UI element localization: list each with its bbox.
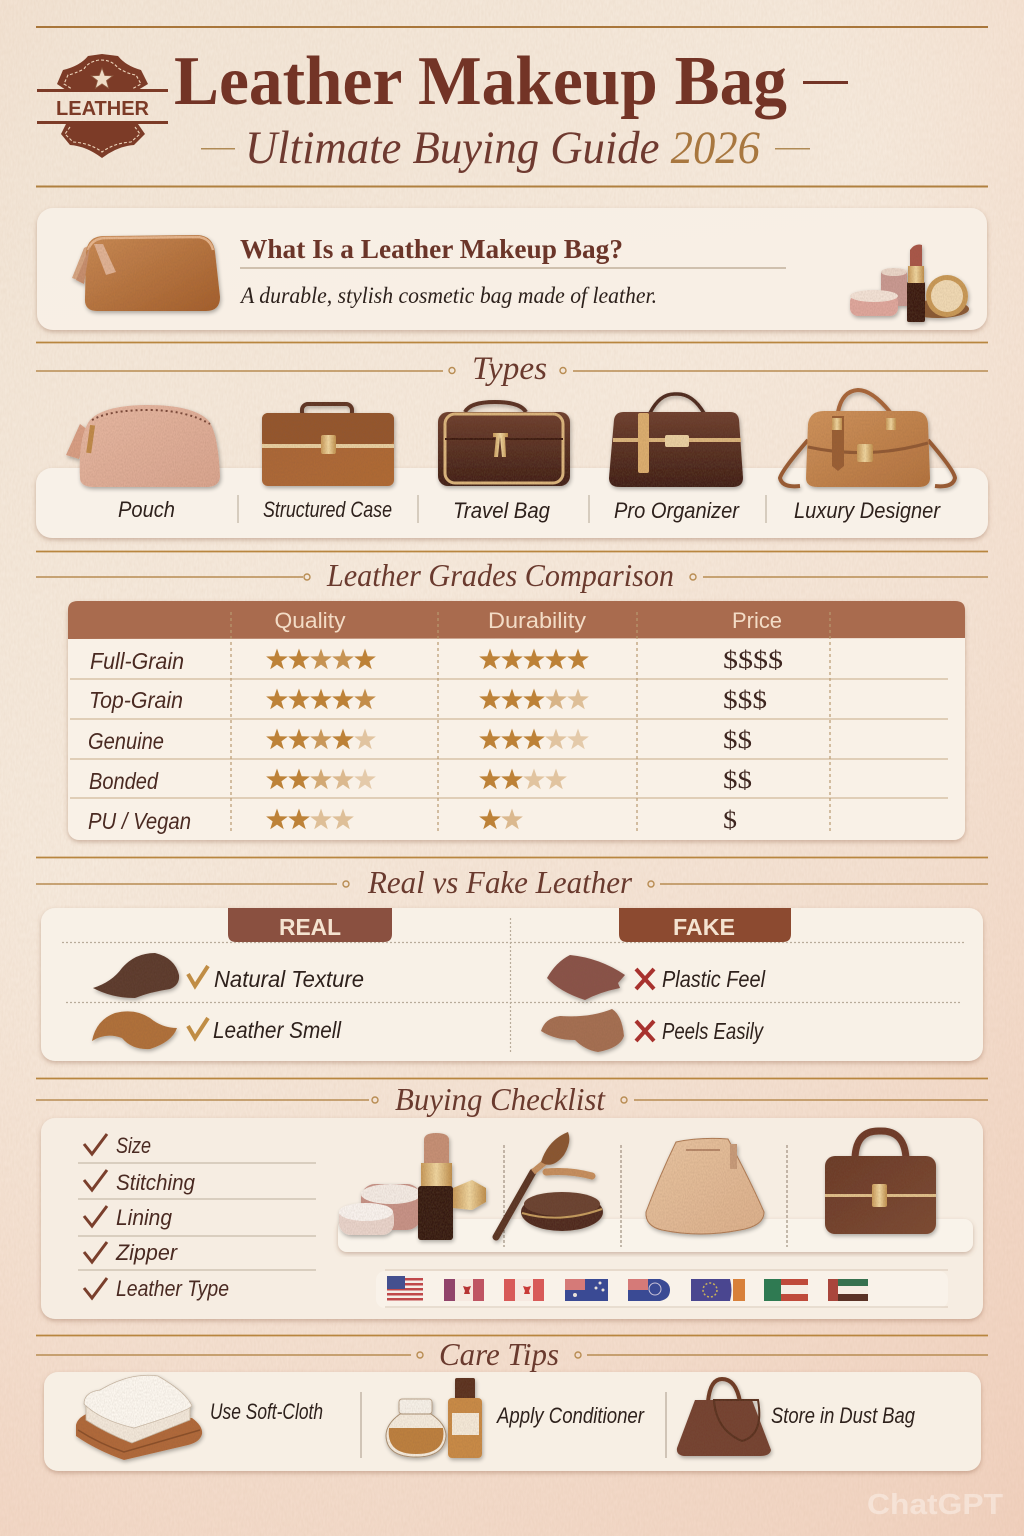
title: Leather Makeup Bag [174,43,787,120]
icon: folded cloth [76,1375,202,1460]
icon: travel bag [438,402,570,486]
type labels [118,497,942,523]
check: natural texture [188,966,208,986]
prices: $$ [723,727,752,754]
type labels: Structured Case [263,497,392,522]
subtitle flourishes [201,148,810,150]
label: natural texture: Natural Texture [214,966,364,992]
icon: brush and pot [496,1132,603,1237]
table header: Durability [488,608,586,633]
section heading: real vs fake leather: Real vs Fake Leather [367,864,633,900]
swatch: fake plastic [547,955,625,1000]
panel: types [36,390,988,538]
flag: uae style [828,1279,868,1301]
icon: pouch [66,405,220,487]
row names: Full-Grain [90,648,184,674]
icon: beige bag [646,1138,764,1234]
tab: real: REAL [279,914,341,940]
checklist: Lining [116,1205,173,1230]
flag: canada [504,1279,544,1301]
row names [88,648,191,834]
flag: usa [387,1276,423,1300]
icon: luxury designer bag [780,390,955,487]
checklist: Zipper [115,1240,179,1265]
row names: PU / Vegan [88,808,191,834]
checklist: Leather Type [116,1276,229,1301]
icon: lipstick and jars [339,1133,486,1240]
checklist: Stitching [116,1170,196,1195]
row names: Bonded [89,768,159,794]
section heading: leather grades comparison [36,557,988,593]
prices: $ [723,807,737,834]
tab: fake: FAKE [673,914,735,940]
watermark: ChatGPT [867,1489,1003,1521]
icon: pro organizer [609,394,743,487]
panel: buying checklist [41,1118,983,1319]
label: leather smell: Leather Smell [213,1017,342,1043]
prices: $$ [723,767,752,794]
check: leather smell [188,1018,208,1038]
x mark: plastic feel [636,969,654,989]
prices [723,647,783,834]
swatch: fake peeling [541,1009,624,1052]
section heading: types [36,351,988,387]
type labels: Pouch [118,497,175,522]
checklist: Size [116,1133,151,1158]
panel: what is a leather makeup bag [37,208,987,330]
section heading: buying checklist: Buying Checklist [395,1081,606,1117]
quality stars [266,648,376,829]
header [36,27,988,186]
flag: canada muted [444,1279,484,1301]
durability stars [479,648,589,829]
tab: real [228,908,392,942]
shelf [338,1219,973,1252]
section heading: leather grades comparison: Leather Grades Comparison [326,557,674,593]
x mark: peels easily [636,1021,654,1041]
flag: new zealand [628,1279,670,1301]
comparison table [68,601,965,840]
swatch: real dark leather [93,953,179,998]
type labels: Luxury Designer [794,498,942,523]
flag: mexico style [764,1279,808,1301]
subtitle: Ultimate Buying Guide 2026 [245,122,760,174]
table header: Quality [274,608,346,633]
tab: fake [619,908,791,942]
panel: real vs fake [41,908,983,1061]
panel: care tips [44,1372,981,1471]
table header [68,601,965,639]
flag strip [376,1270,948,1308]
section heading: care tips: Care Tips [439,1336,559,1372]
row names: Top-Grain [89,687,183,713]
icon: dust bag handbag [677,1379,771,1456]
label: store in dust bag: Store in Dust Bag [771,1403,916,1428]
section heading: care tips [36,1336,988,1372]
row names: Genuine [88,728,164,754]
section heading: types: Types [472,351,547,387]
section heading: buying checklist [36,1081,988,1117]
label: peels easily: Peels Easily [662,1018,764,1044]
label: plastic feel: Plastic Feel [662,966,766,992]
icon: tan leather pouch [72,235,220,311]
icon: brown briefcase [825,1131,936,1234]
icon: conditioner jar and bottle [386,1378,482,1458]
section heading: real vs fake leather [36,864,988,900]
flag: australia [565,1279,608,1301]
table header: Price [732,608,782,633]
description: A durable, stylish cosmetic bag made of leather. [239,283,657,308]
heading: What Is a Leather Makeup Bag? [240,234,623,264]
label: use soft-cloth: Use Soft-Cloth [210,1399,323,1424]
title dash [803,81,848,84]
prices: $$$ [723,687,767,714]
checklist [78,1133,316,1301]
type labels: Travel Bag [453,498,551,523]
flag: european union [691,1279,745,1301]
icon: leather badge logo [37,54,168,158]
prices: $$$$ [723,647,783,674]
icon: cosmetics group [850,245,969,322]
type labels: Pro Organizer [614,498,741,523]
icon: leather badge logo: LEATHER [56,98,150,120]
label: apply conditioner: Apply Conditioner [495,1403,645,1428]
icon: structured case [262,404,394,486]
swatch: real tan leather [92,1011,177,1049]
